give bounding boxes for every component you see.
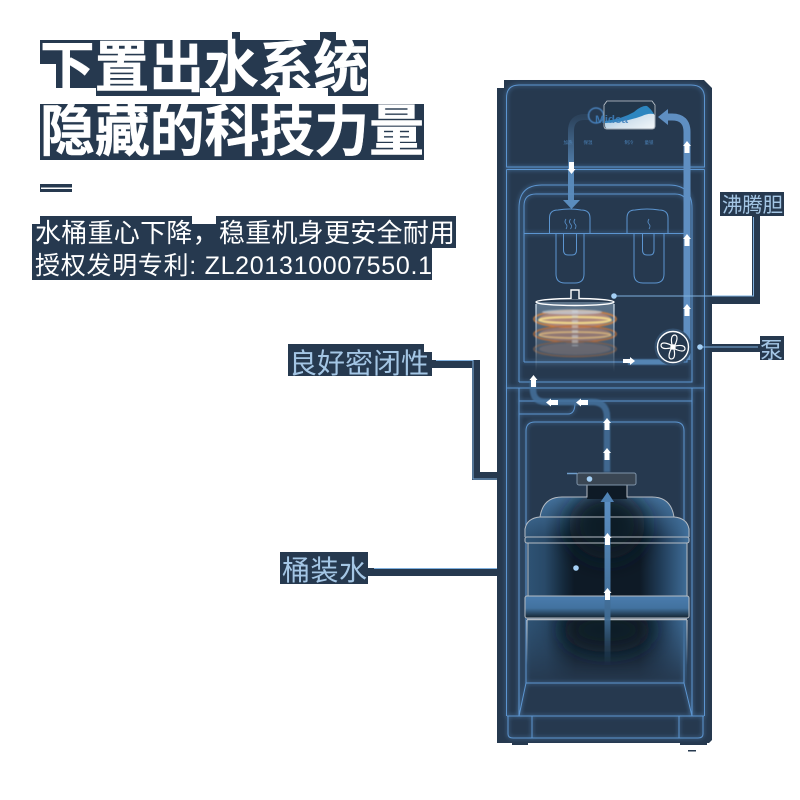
bottom mark	[688, 750, 696, 752]
icon: control panel logo and screen: 童锁	[644, 139, 654, 146]
icon: cold water faucet	[627, 209, 668, 283]
water bottle	[525, 485, 689, 681]
water dispenser	[497, 80, 758, 745]
icon: pump fan	[654, 328, 692, 366]
icon: control panel logo and screen: 加热	[564, 139, 573, 146]
subtitle text	[32, 216, 456, 280]
leader: 良好密闭性	[288, 344, 590, 480]
leader: 泵	[708, 336, 784, 363]
bottle cap	[567, 473, 636, 485]
title divider	[40, 184, 72, 192]
water path: inside bottle	[600, 492, 614, 665]
leader: 良好密闭性: 良好密闭性	[289, 348, 429, 379]
water path: pump to display	[623, 109, 691, 365]
machine silhouette	[497, 80, 712, 745]
subtitle text: 水桶重心下降，稳重机身更安全耐用	[35, 218, 455, 248]
water path: top left to hot faucet	[563, 117, 590, 209]
title: 下置出水系统	[40, 36, 368, 99]
bottle lower fill	[527, 618, 687, 681]
title: 隐藏的科技力量	[40, 100, 424, 163]
leader: 沸腾胆	[708, 192, 784, 304]
machine outlines	[506, 85, 704, 738]
boiling tank	[534, 290, 616, 372]
leader: 桶装水: 桶装水	[282, 555, 367, 586]
subtitle text: 授权发明专利: ZL201310007550.1	[35, 252, 432, 280]
icon: control panel logo and screen: 制冷	[624, 139, 634, 146]
icon: hot water faucet	[550, 209, 590, 283]
water path: bottle to boiler	[530, 375, 611, 472]
icon: control panel logo and screen: Midea	[595, 114, 629, 126]
leader: 桶装水	[280, 552, 576, 586]
leader: 泵: 泵	[760, 337, 783, 363]
callout dots and thin leaders	[573, 217, 758, 571]
title	[40, 32, 424, 163]
bottle upper fill	[525, 485, 689, 600]
leader: 沸腾胆: 沸腾胆	[722, 194, 783, 217]
icon: control panel logo and screen: 保温	[584, 139, 593, 146]
icon: control panel logo and screen	[564, 101, 655, 146]
